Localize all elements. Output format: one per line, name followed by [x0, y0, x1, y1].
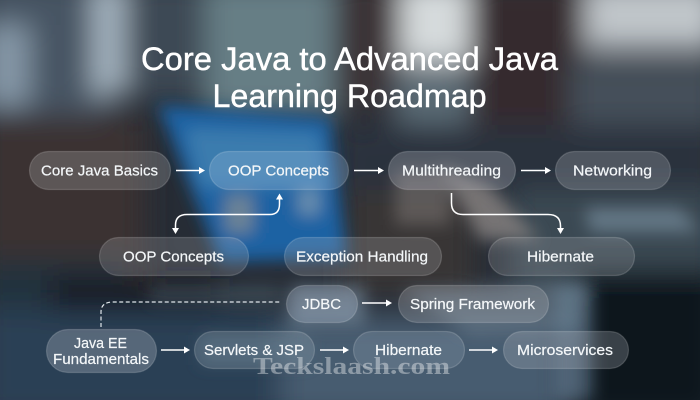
arrow: JDBC to Spring Framework: [362, 300, 392, 306]
node: OOP Concepts: [210, 152, 348, 190]
node: OOP Concepts: OOP Concepts: [228, 164, 329, 180]
node: Exception Handling: [284, 238, 442, 276]
node: Hibernate second row: Hibernate: [527, 250, 594, 266]
node: Spring Framework: [398, 286, 548, 322]
arrow: Multithreading to Networking: [521, 167, 551, 174]
title: Core Java to Advanced Java: [141, 41, 558, 77]
arrow: Java EE Fundamentals to Servlets and JSP: [161, 346, 190, 354]
dashed connector: Java EE Fundamentals to JDBC: [101, 302, 281, 327]
node: Multithreading: [388, 152, 516, 190]
arrow: Servlets and JSP to Hibernate: [320, 346, 349, 354]
node: OOP Concepts second row: [100, 238, 248, 276]
node: Networking: Networking: [573, 164, 652, 180]
node: OOP Concepts second row: OOP Concepts: [123, 250, 224, 266]
node: Java EE Fundamentals: Java EE: [74, 336, 127, 352]
node: Java EE Fundamentals: Fundamentals: [53, 352, 149, 368]
node: Hibernate third row: Hibernate: [375, 343, 442, 359]
node: Hibernate third row: [354, 332, 464, 368]
node: Servlets and JSP: Servlets & JSP: [204, 343, 304, 359]
arrow: Core Java Basics to OOP Concepts: [176, 167, 205, 174]
node: Exception Handling: Exception Handling: [296, 250, 428, 266]
arrow: Multithreading to Hibernate: [452, 193, 564, 234]
node: Microservices: [504, 332, 628, 368]
title: Learning Roadmap: [212, 78, 486, 114]
node: Servlets and JSP: [194, 332, 314, 368]
arrow: OOP Concepts two-way connector: [172, 194, 283, 234]
node: Microservices: Microservices: [517, 343, 613, 359]
node: Multithreading: Multithreading: [402, 164, 501, 180]
node: Spring Framework: Spring Framework: [410, 297, 536, 313]
watermark: Teckslaash.com: [253, 354, 450, 380]
node: Core Java Basics: Core Java Basics: [41, 164, 158, 180]
title: [141, 41, 558, 114]
node: Networking: [556, 152, 670, 190]
node: Core Java Basics: [30, 152, 170, 190]
arrow: OOP Concepts to Multithreading: [354, 167, 384, 174]
node: JDBC: JDBC: [302, 297, 341, 313]
arrow: Hibernate to Microservices: [469, 346, 498, 354]
node: Hibernate second row: [488, 238, 634, 276]
node: Java EE Fundamentals: [46, 330, 156, 372]
node: JDBC: [286, 286, 358, 322]
